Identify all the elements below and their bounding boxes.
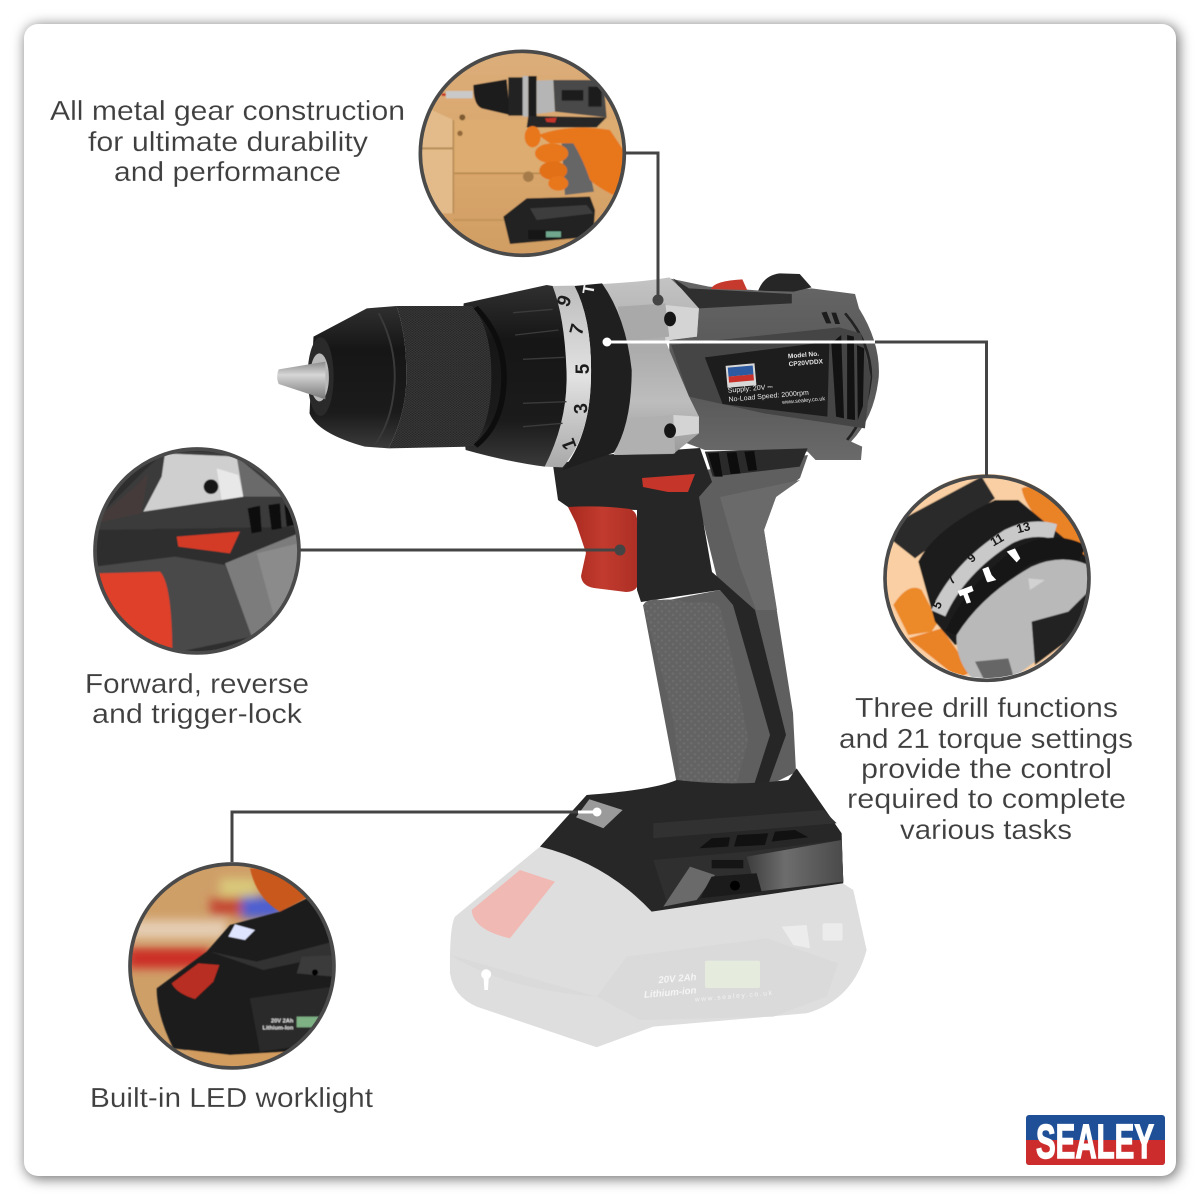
text: drill functions: required to complete xyxy=(847,783,1126,814)
rear cap outline xyxy=(845,313,871,440)
ring numbers: 5 xyxy=(930,599,945,611)
handle black trim xyxy=(553,448,786,785)
text: metal gear construction: and performance xyxy=(114,156,341,187)
trigger xyxy=(568,506,637,592)
text: LED worklight: Built-in LED worklight xyxy=(90,1082,373,1113)
text: metal gear construction xyxy=(50,95,405,187)
dial numbers: 5 xyxy=(573,363,594,374)
battery pack (ghosted): www.sealey.co.uk xyxy=(694,990,774,1004)
text: drill functions: various tasks xyxy=(900,814,1072,845)
dial numbers xyxy=(553,283,599,452)
model plate text: Model No. xyxy=(788,351,819,360)
handle upper panel xyxy=(720,480,800,610)
model plate text: No-Load Speed: 2000rpm xyxy=(728,390,809,404)
photo: torque dial closeup xyxy=(883,474,1091,682)
ring numbers: 9 xyxy=(964,550,979,566)
drill: head xyxy=(277,273,879,477)
text: forward reverse: and trigger-lock xyxy=(92,698,303,729)
top strip xyxy=(673,278,792,308)
drill: handle grip and base xyxy=(540,600,843,912)
circle border xyxy=(95,449,299,653)
jaws tip xyxy=(277,362,325,399)
rear black band xyxy=(563,283,632,470)
ring numbers: 7 xyxy=(944,573,959,587)
dial numbers: 1 xyxy=(558,435,582,452)
circle border xyxy=(130,864,334,1068)
ring numbers: 11 xyxy=(988,530,1006,549)
model plate xyxy=(705,342,829,417)
base clip xyxy=(700,873,762,898)
chuck collar xyxy=(308,337,334,416)
model plate text: CP20VDDX xyxy=(788,358,824,368)
text: forward reverse: Forward, reverse xyxy=(85,668,309,699)
plate logo xyxy=(726,363,756,388)
ring numbers: 13 xyxy=(1015,519,1032,536)
text: metal gear construction: for ultimate durability xyxy=(88,126,368,157)
dial numbers: T xyxy=(580,283,599,296)
handle shell xyxy=(643,455,808,790)
lower vents xyxy=(705,448,808,477)
photo: hand holding drill xyxy=(418,50,626,258)
rear vents xyxy=(831,335,864,420)
photo: LED worklight closeup: 20V 2Ah xyxy=(271,1018,294,1024)
rear top knob xyxy=(758,273,812,292)
photo: LED worklight closeup: Lithium-Ion xyxy=(263,1026,294,1032)
base vents xyxy=(699,830,808,848)
dial numbers: 7 xyxy=(566,322,589,337)
photo: trigger and switch closeup xyxy=(93,447,301,655)
upper vent xyxy=(821,312,840,324)
circle border xyxy=(885,476,1089,680)
text: drill functions: provide the control xyxy=(861,753,1112,784)
battery pack (ghosted): Lithium-ion xyxy=(644,985,697,1001)
chuck nose xyxy=(310,306,406,448)
text: metal gear construction: All metal gear construction xyxy=(50,95,405,126)
battery pack (ghosted) xyxy=(450,813,867,1047)
chuck sleeve xyxy=(389,306,491,448)
dial numbers: 9 xyxy=(553,293,577,310)
base side panel xyxy=(747,840,843,892)
model plate text xyxy=(725,350,827,411)
connector: LED photo to worklight xyxy=(232,808,602,862)
scale ring xyxy=(545,286,591,467)
base corner panel xyxy=(663,867,715,907)
drill: handle xyxy=(553,448,808,790)
gear housing xyxy=(460,285,567,467)
connector: top photo to gear housing xyxy=(625,153,662,304)
model plate text: www.sealey.co.uk xyxy=(781,396,826,406)
connector: dial photo to torque ring xyxy=(602,338,986,476)
connector: switch photo to trigger xyxy=(300,546,624,554)
housing rim xyxy=(476,307,504,446)
battery pack (ghosted): 20V 2Ah xyxy=(657,972,697,986)
forward reverse switch xyxy=(642,474,695,492)
rubber grip xyxy=(643,600,748,784)
model plate text: Supply: 20V ⎓ xyxy=(728,384,774,395)
base ridge xyxy=(653,810,837,838)
base foot xyxy=(540,768,843,912)
motor housing xyxy=(669,278,879,460)
mode icons xyxy=(958,548,1020,604)
LED lens xyxy=(576,799,623,828)
mode button xyxy=(711,279,747,290)
ring numbers xyxy=(930,519,1032,611)
text: drill functions: Three drill functions xyxy=(855,692,1118,723)
metal collar xyxy=(602,277,699,455)
screws xyxy=(664,312,676,326)
text: drill functions xyxy=(839,692,1133,845)
text: drill functions: and 21 torque settings xyxy=(839,723,1133,754)
dark band xyxy=(671,327,871,428)
photo: LED worklight closeup xyxy=(128,862,336,1070)
text: forward reverse xyxy=(85,668,309,729)
collar tabs xyxy=(665,305,699,437)
dial numbers: 3 xyxy=(571,402,592,415)
housing ribs xyxy=(513,309,566,427)
circle border xyxy=(420,51,624,255)
